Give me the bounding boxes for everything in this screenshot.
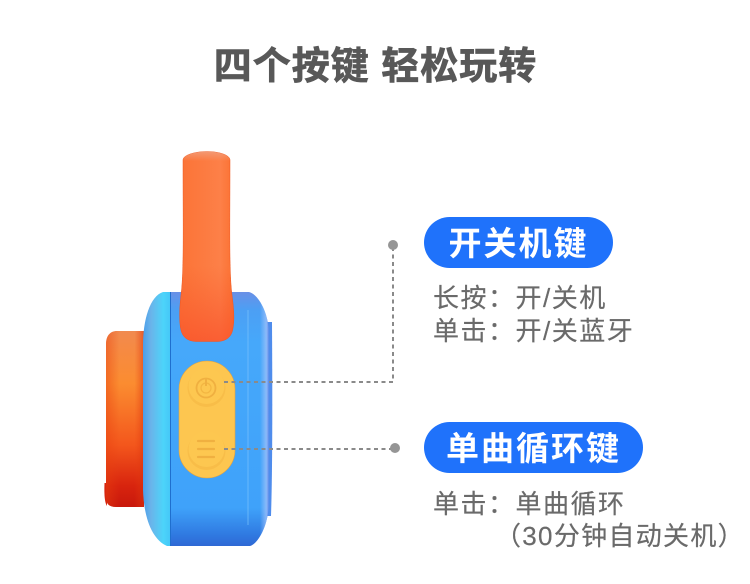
yellow button plate bbox=[179, 361, 235, 478]
text: power key description: 长按：开/关机 bbox=[433, 283, 607, 313]
blue body side panel bbox=[143, 292, 170, 546]
label: loop key bbox=[424, 422, 643, 473]
body edge light bbox=[240, 292, 268, 546]
text: loop key description: 单击：单曲循环 bbox=[433, 489, 626, 519]
connector: loop key bbox=[224, 443, 400, 453]
seam line bbox=[170, 292, 172, 546]
blue body main face bbox=[170, 292, 268, 546]
product illustration: speaker side view bbox=[104, 152, 272, 546]
label: power key bbox=[424, 217, 613, 268]
orange handle bbox=[180, 152, 234, 342]
text: loop key description bbox=[433, 489, 745, 551]
connector: power key bbox=[224, 240, 398, 382]
text: loop key description: （30分钟自动关机） bbox=[495, 521, 745, 551]
body highlight bbox=[247, 310, 249, 525]
right edge strip bbox=[267, 322, 272, 516]
label: power key: 开关机键 bbox=[448, 225, 588, 262]
title: 四个按键 轻松玩转 bbox=[214, 46, 537, 88]
label: loop key: 单曲循环键 bbox=[446, 430, 621, 467]
icon: power button bbox=[188, 368, 226, 407]
text: power key description bbox=[433, 283, 634, 346]
text: power key description: 单击：开/关蓝牙 bbox=[433, 316, 634, 346]
icon: loop menu button bbox=[188, 431, 226, 470]
rear orange speaker cover bbox=[104, 331, 144, 507]
